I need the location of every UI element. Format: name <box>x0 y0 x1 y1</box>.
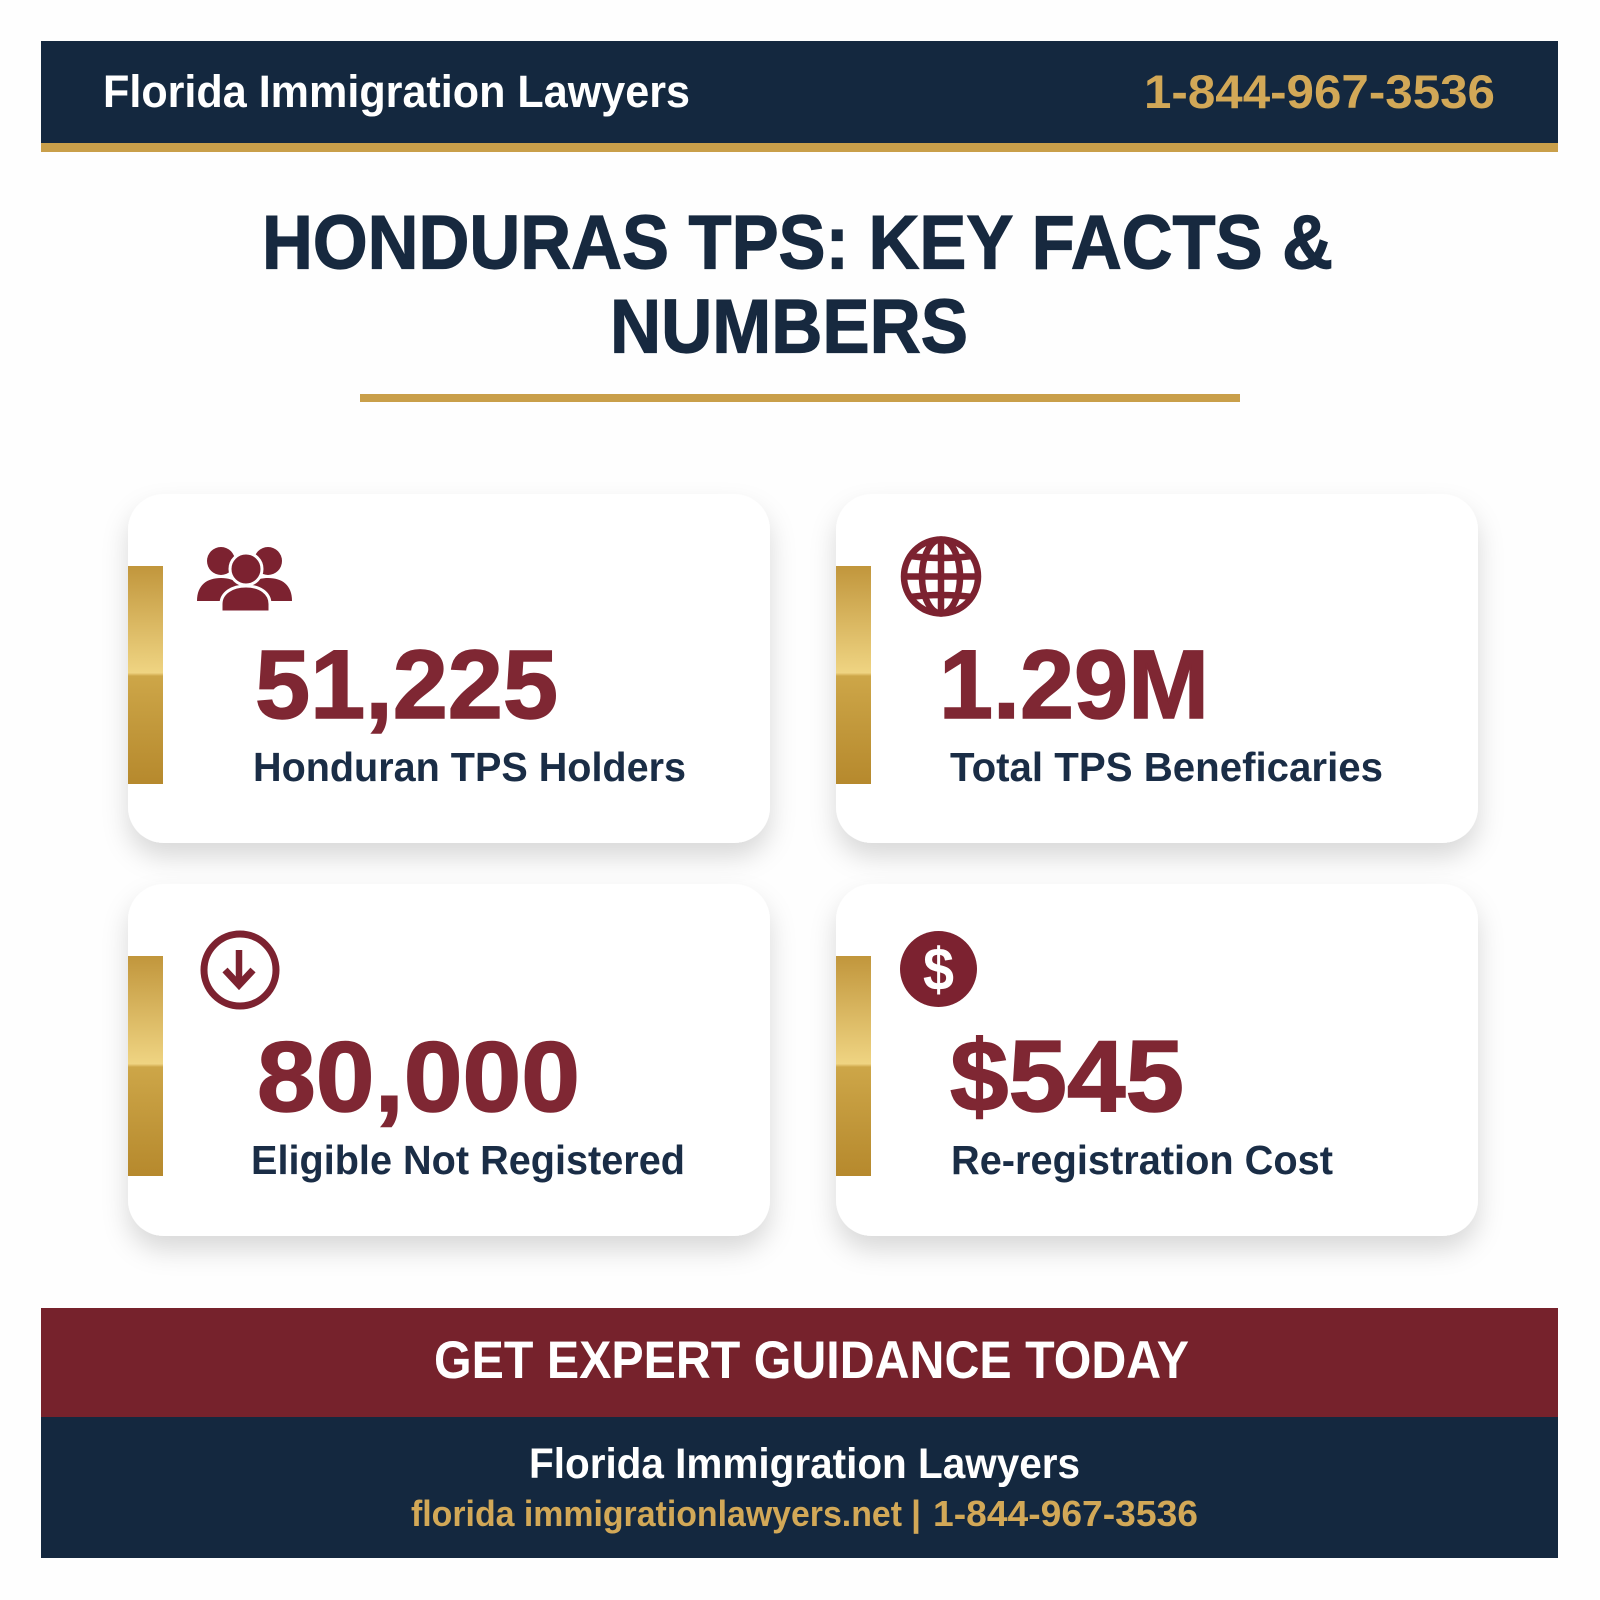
title: NUMBERS <box>610 284 968 370</box>
title underline <box>360 394 1240 402</box>
stat label: Re-registration Cost <box>951 1137 1333 1183</box>
icon: dollar coin: $ <box>923 936 954 1003</box>
stat value: 51,225 <box>255 630 558 739</box>
title: HONDURAS TPS: KEY FACTS & <box>262 200 1333 286</box>
gold accent bar <box>836 956 871 1176</box>
header firm name: Florida Immigration Lawyers <box>103 66 690 117</box>
title <box>262 200 1333 370</box>
call to action text: GET EXPERT GUIDANCE TODAY <box>434 1331 1189 1390</box>
icon: people group <box>197 547 292 612</box>
gold accent bar <box>836 566 871 784</box>
stat value: 80,000 <box>257 1021 580 1132</box>
gold accent bar <box>128 566 163 784</box>
header phone number: 1-844-967-3536 <box>1144 65 1495 118</box>
stat label: Honduran TPS Holders <box>253 744 686 790</box>
stat label: Eligible Not Registered <box>251 1137 685 1183</box>
stat value: $545 <box>950 1021 1184 1133</box>
footer firm name: Florida Immigration Lawyers <box>529 1440 1080 1488</box>
stat value: 1.29M <box>939 630 1209 739</box>
gold accent bar <box>128 956 163 1176</box>
stat card: Honduran TPS holders <box>128 494 770 843</box>
footer website and phone <box>411 1493 1198 1535</box>
stat card: eligible not registered <box>128 884 770 1236</box>
stat card: re-registration cost <box>836 884 1478 1236</box>
icon: globe <box>904 539 978 614</box>
stat card: total TPS beneficiaries <box>836 494 1478 843</box>
stat label: Total TPS Beneficaries <box>950 744 1383 790</box>
icon: down arrow in circle <box>204 934 276 1006</box>
icon: dollar coin <box>900 931 977 1007</box>
header bar <box>41 41 1558 152</box>
footer contact panel <box>41 1417 1558 1558</box>
footer website and phone: | <box>911 1493 921 1535</box>
call to action banner <box>41 1308 1558 1417</box>
footer website and phone: florida immigrationlawyers.net <box>411 1493 902 1534</box>
footer website and phone: 1-844-967-3536 <box>933 1493 1198 1534</box>
